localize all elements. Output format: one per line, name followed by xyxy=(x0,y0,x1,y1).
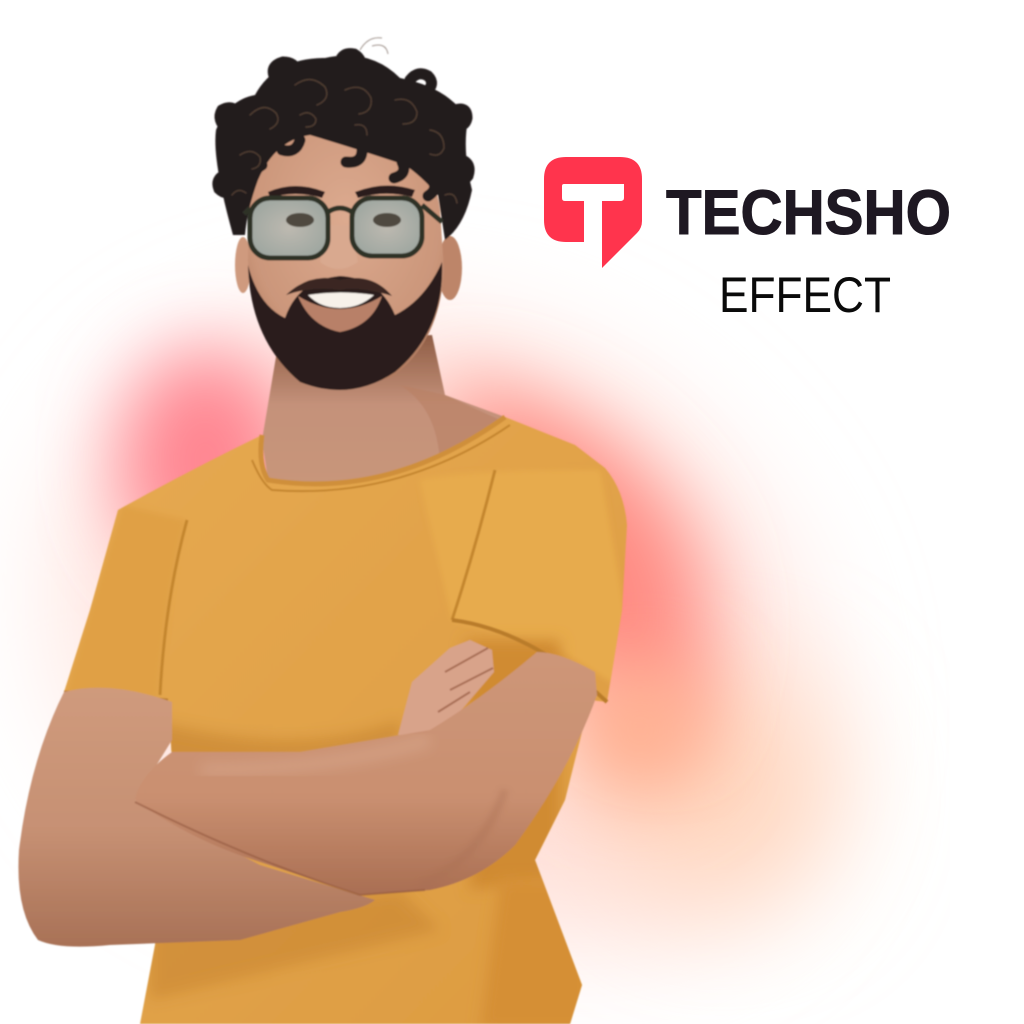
face xyxy=(248,128,444,385)
hand behind arm xyxy=(398,640,494,735)
logo wordmark: TECHSHO xyxy=(666,178,951,248)
person: man in yellow t-shirt with crossed arms xyxy=(18,38,660,1024)
beard xyxy=(248,262,442,390)
ear left xyxy=(235,237,251,293)
t-shirt shading xyxy=(94,508,170,598)
t-shirt xyxy=(64,416,628,1024)
neck xyxy=(262,335,505,490)
forearm (viewer right) xyxy=(135,652,597,895)
glasses xyxy=(244,198,442,258)
moustache xyxy=(286,278,392,296)
eyebrows xyxy=(268,185,415,198)
chin beard xyxy=(318,330,362,345)
subtitle: EFFECT xyxy=(719,267,891,323)
sleeve seams xyxy=(64,692,168,700)
lips and chin xyxy=(298,296,382,332)
nose xyxy=(320,225,358,269)
hair xyxy=(215,38,472,240)
ear right xyxy=(438,236,462,300)
smile teeth xyxy=(308,292,374,308)
left arm (viewer) xyxy=(18,688,375,947)
logo icon: red speech bubble with T xyxy=(544,157,642,268)
shirt collar xyxy=(261,417,505,484)
